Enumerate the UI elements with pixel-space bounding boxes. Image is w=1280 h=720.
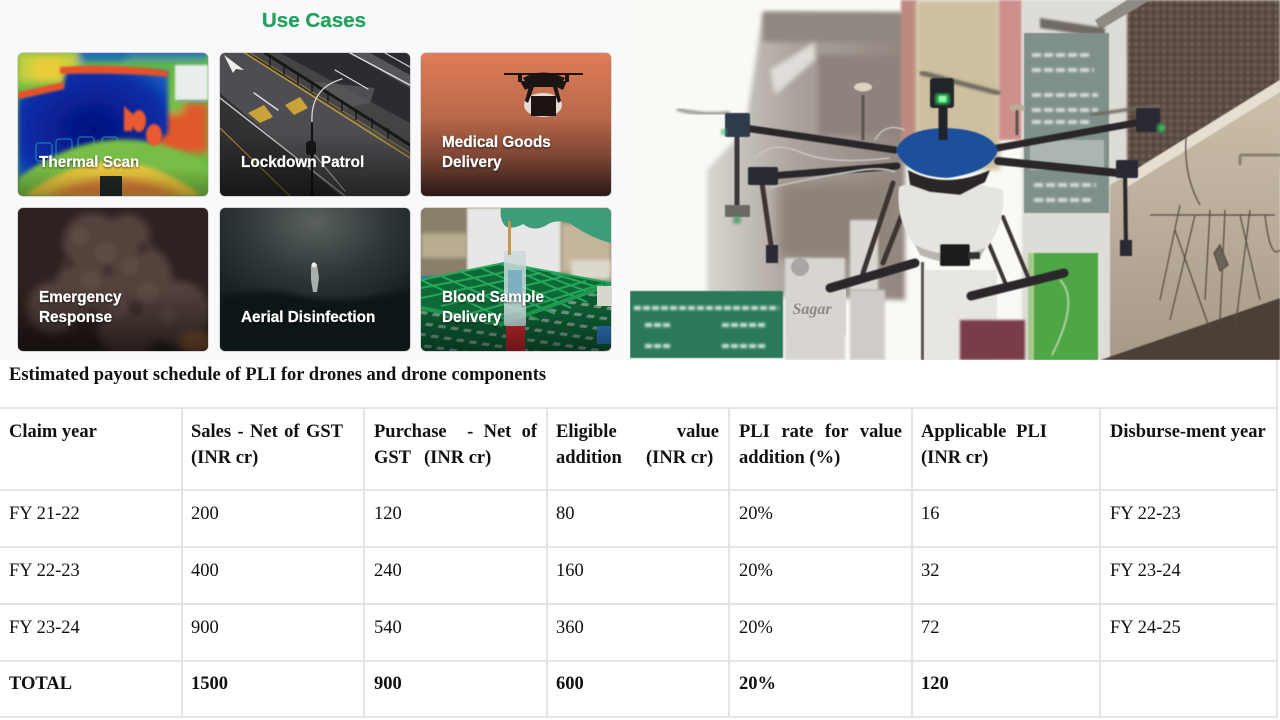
- label: Blood Sample Delivery: Delivery: [442, 308, 502, 326]
- table header row: Disburse-ment year: [1110, 422, 1266, 442]
- table row: FY 22-23: [9, 561, 1181, 581]
- table row: FY 22-23: 32: [921, 561, 940, 581]
- image: sample rack and gloved hand: [421, 208, 611, 351]
- table header row: (INR cr): [191, 448, 258, 468]
- table row: FY 21-22: FY 22-23: [1110, 504, 1181, 524]
- table header row: addition: [556, 448, 622, 468]
- table header row: Sales - Net of GST: [191, 422, 343, 442]
- table row: FY 23-24: FY 23-24: [9, 618, 80, 638]
- table header row: (INR cr): [921, 448, 988, 468]
- label: Emergency Response: Response: [39, 308, 112, 326]
- table header row: addition (%): [739, 448, 840, 468]
- table row: FY 22-23: 160: [556, 561, 584, 581]
- table row: TOTAL: 20%: [739, 674, 776, 694]
- table row: FY 22-23: 400: [191, 561, 219, 581]
- table row: FY 22-23: 240: [374, 561, 402, 581]
- card: Aerial Disinfection: [220, 208, 410, 351]
- table row: FY 21-22: 200: [191, 504, 219, 524]
- GPS mast: [854, 82, 1025, 140]
- label: Emergency Response: Emergency: [39, 289, 121, 306]
- label: Emergency Response: [39, 289, 122, 327]
- sign: grey shop board: [1024, 33, 1109, 213]
- banner: green hoarding: [1028, 253, 1098, 360]
- card: Blood Sample Delivery: [421, 208, 611, 351]
- table row: TOTAL: 600: [556, 674, 584, 694]
- image: thermal camera view: [18, 53, 208, 196]
- label: Blood Sample Delivery: [442, 289, 545, 328]
- table row: TOTAL: 120: [921, 674, 949, 694]
- table row: FY 23-24: 540: [374, 618, 402, 638]
- table header row: (INR cr): [424, 448, 491, 468]
- image: smoke cloud: [18, 208, 208, 351]
- table header row: GST: [374, 448, 411, 468]
- table header row: Applicable PLI: [921, 422, 1047, 442]
- table row: FY 21-22: [9, 504, 1181, 524]
- label: Blood Sample Delivery: Blood Sample: [442, 289, 544, 306]
- table header row: PLI rate for value: [739, 422, 902, 442]
- scene: buildings: [707, 0, 1280, 360]
- sign: Sagar board: [786, 290, 846, 335]
- label: Medical Goods Delivery: [442, 134, 552, 172]
- card: Emergency Response: [18, 208, 208, 351]
- table header row: (INR cr): [646, 448, 713, 468]
- photo: spraying drone over street: [630, 0, 1280, 360]
- table row: FY 21-22: 120: [374, 504, 402, 524]
- table header row: Eligible value: [556, 422, 719, 442]
- panel: payout table: [0, 360, 1280, 720]
- table row: TOTAL: TOTAL: [9, 674, 72, 694]
- table row: FY 23-24: 72: [921, 618, 940, 638]
- table row: FY 23-24: [9, 618, 1181, 638]
- image: figure in fog: [220, 208, 410, 351]
- table row: TOTAL: [9, 674, 949, 694]
- table header row: Purchase - Net of: [374, 422, 537, 442]
- table row: FY 22-23: 20%: [739, 561, 773, 581]
- card: Medical Goods Delivery: [421, 53, 611, 196]
- table row: FY 23-24: FY 24-25: [1110, 618, 1181, 638]
- label: Thermal Scan: Thermal Scan: [39, 154, 139, 170]
- table header row: Claim year: [9, 422, 97, 442]
- table row: FY 21-22: FY 21-22: [9, 504, 80, 524]
- icon: agricultural drone: [677, 73, 1165, 296]
- label: Medical Goods Delivery: Medical Goods: [442, 134, 551, 151]
- table row: FY 23-24: 360: [556, 618, 584, 638]
- table row: TOTAL: 900: [374, 674, 402, 694]
- label: Medical Goods Delivery: Delivery: [442, 154, 502, 170]
- label: Lockdown Patrol: Lockdown Patrol: [241, 154, 364, 170]
- table row: FY 22-23: FY 22-23: [9, 561, 80, 581]
- label: Aerial Disinfection: Aerial Disinfection: [241, 308, 375, 326]
- heading: Use Cases: Use Cases: [262, 9, 366, 32]
- image: aerial road: [220, 53, 410, 196]
- wires on the right wall: [1150, 120, 1280, 330]
- table row: FY 23-24: 900: [191, 618, 219, 638]
- image: delivery drone at dusk: [421, 53, 611, 196]
- table row: FY 21-22: 80: [556, 504, 574, 524]
- table row: FY 21-22: 16: [921, 504, 940, 524]
- table lines: [0, 360, 1278, 718]
- card: Lockdown Patrol: [220, 53, 410, 196]
- panel: use cases: [0, 0, 630, 360]
- table row: FY 23-24: 20%: [739, 618, 773, 638]
- sign: Sagar board: Sagar: [792, 301, 832, 318]
- card: Thermal Scan: [18, 53, 208, 196]
- table row: TOTAL: 1500: [191, 674, 228, 694]
- table row: FY 22-23: FY 23-24: [1110, 561, 1181, 581]
- table header row: [9, 422, 1266, 468]
- table row: FY 21-22: 20%: [739, 504, 773, 524]
- heading: table title: Estimated payout schedule of PLI for drones and drone components: [9, 365, 546, 385]
- sign: green street board: [630, 291, 783, 358]
